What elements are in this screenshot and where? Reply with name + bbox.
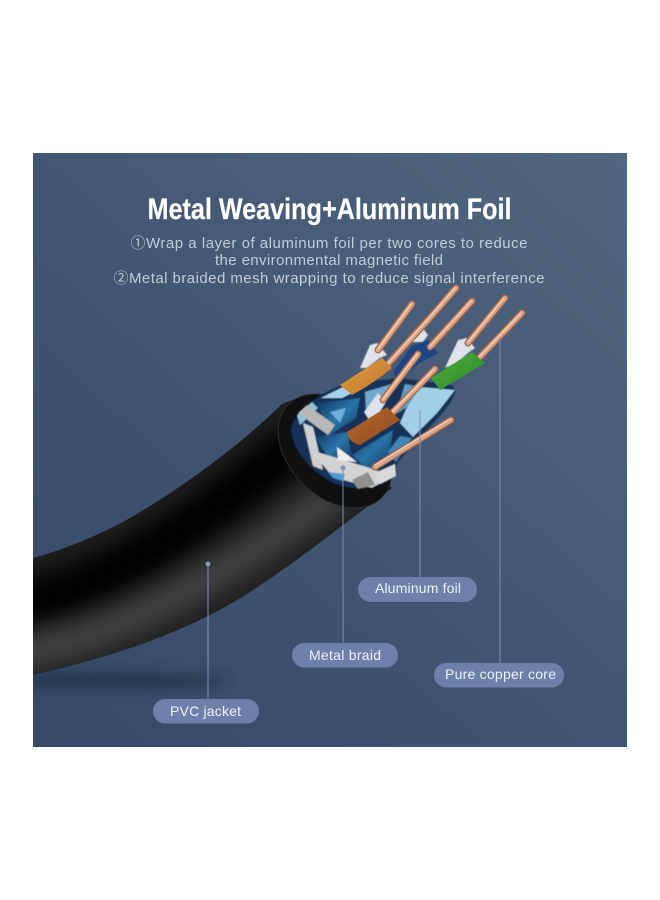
cable end face — [256, 372, 414, 530]
brown wire — [347, 407, 400, 445]
cable: PVC jacket — [33, 394, 392, 675]
cable shadow — [0, 673, 230, 689]
leader dots — [206, 466, 346, 566]
insulated wires — [340, 352, 485, 445]
label: metal braid: Metal braid — [309, 647, 381, 663]
description text — [114, 235, 544, 287]
aluminum foil highlight — [400, 387, 455, 437]
label: PVC jacket — [153, 699, 259, 724]
label: metal braid — [292, 643, 398, 668]
label: pure copper core: Pure copper core — [445, 666, 556, 682]
description text: ①Wrap a layer of aluminum foil per two cores to reduce — [130, 235, 528, 252]
description text: ②Metal braided mesh wrapping to reduce signal interference — [114, 270, 544, 287]
description text: the environmental magnetic field — [215, 252, 443, 269]
copper conductors — [375, 288, 522, 467]
panel: background — [33, 153, 627, 747]
label: pure copper core — [434, 663, 564, 688]
title: Metal Weaving+Aluminum Foil — [148, 193, 512, 226]
white foil wraps — [360, 327, 475, 425]
metal braid bands — [298, 405, 335, 435]
green wire — [431, 352, 485, 390]
cable core: foil and braid — [291, 378, 456, 489]
blue wire — [393, 340, 438, 382]
orange wire — [340, 358, 392, 395]
label: aluminum foil: Aluminum foil — [375, 580, 461, 596]
label: PVC jacket: PVC jacket — [170, 703, 241, 719]
label: aluminum foil — [358, 577, 477, 602]
leader lines — [208, 338, 500, 700]
